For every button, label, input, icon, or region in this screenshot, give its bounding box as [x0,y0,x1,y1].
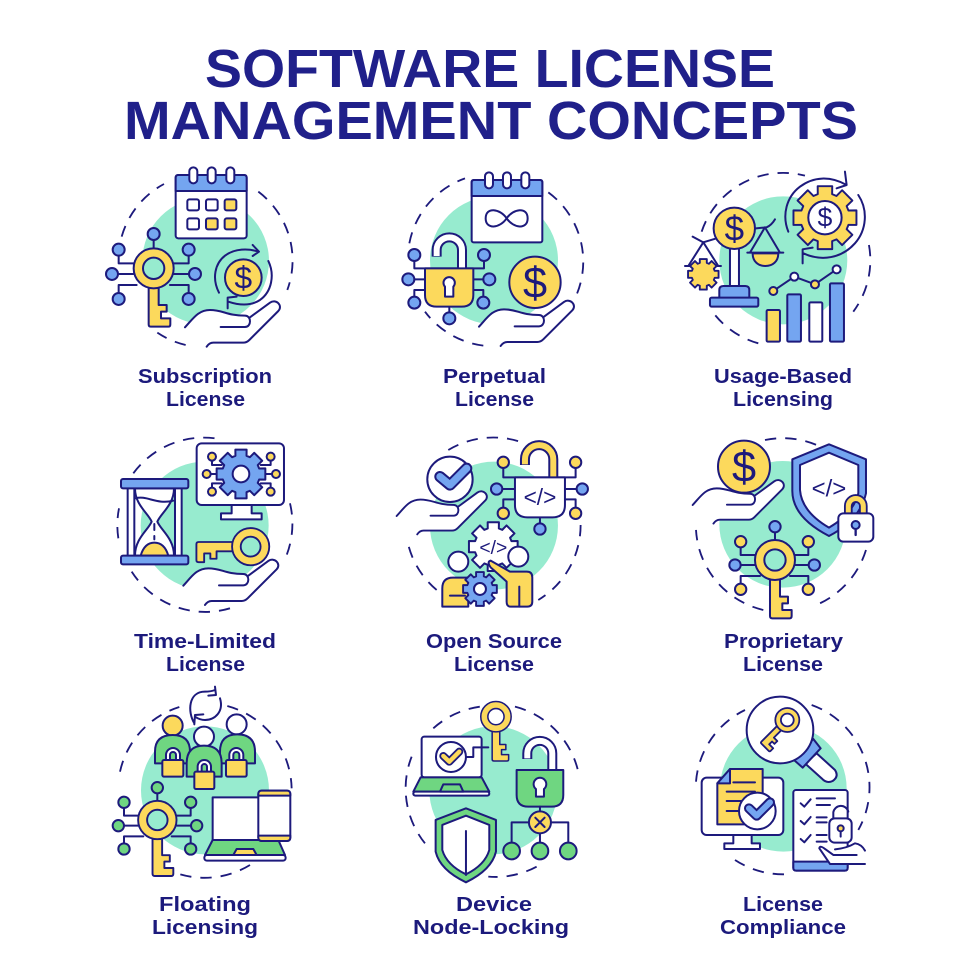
label [152,893,258,939]
icon: balance scale: $ [725,209,744,248]
icon: monitor with gear [197,443,284,519]
panel: proprietary license [693,438,873,676]
title [124,39,858,151]
label: Subscription [138,365,272,388]
icon: balance scale [685,208,783,307]
label: Time-Limited [134,630,276,653]
icon: floating licensing [113,687,292,878]
label: License [166,388,245,411]
label: Node-Locking [413,916,569,939]
label [413,893,569,939]
label [138,365,272,411]
icon: hand with coin [693,441,784,528]
label: Usage-Based [714,365,852,388]
icon: key [196,528,269,565]
label: Licensing [733,388,833,411]
label [443,365,546,411]
icon: hourglass [121,479,188,564]
label: Perpetual [443,365,546,388]
panel: floating licensing [113,687,292,939]
label [724,630,844,676]
icon: padlock with network nodes [402,237,495,324]
icon: shield [436,808,496,882]
icon: time-limited license [117,438,292,612]
icon: rotation arrows [190,687,221,724]
icon: users with padlocks [155,714,255,789]
icon: key with network nodes [106,228,201,327]
title: MANAGEMENT CONCEPTS [124,91,858,151]
label: Device [456,893,532,916]
icon: subscription license [106,167,293,352]
icon: calendar [176,167,247,238]
icon: hand with coin: $ [732,444,756,492]
icon: code shield with padlock: </> [812,476,846,503]
panel: open source license [397,438,588,676]
icon: dollar coin [509,257,561,308]
icon: hand with check mark [397,457,487,539]
title: SOFTWARE LICENSE [205,39,775,99]
panel: perpetual license [402,172,583,411]
panel: license compliance [696,697,870,939]
icon: device node-locking [406,701,579,882]
label: Open Source [426,630,562,653]
icon: code padlock with nodes [491,445,588,535]
label: License [743,653,823,676]
icon: dollar coin: $ [523,259,547,307]
bar chart [767,265,844,342]
icon: open hand [185,301,280,352]
icon: padlock with decision tree [503,741,577,859]
icon: code padlock with nodes: </> [524,484,556,510]
label [720,893,846,939]
label: License [455,388,534,411]
icon: laptop with check mark [413,737,489,796]
icon: magnifier with key [747,697,837,782]
icon: perpetual license [402,172,583,351]
icon: proprietary license [693,438,873,618]
icon: laptop and phone [204,791,290,861]
icon: dollar renewal: $ [235,259,253,295]
label: License [166,653,245,676]
label: Compliance [720,916,846,939]
label: Licensing [152,916,258,939]
label [714,365,852,411]
icon: key with network nodes [113,782,202,876]
label: Proprietary [724,630,844,653]
icon: monitor with document [702,769,783,849]
icon: infinity calendar [472,172,542,242]
icon: developers with gears: </> [479,538,507,559]
panel: subscription license [106,167,293,411]
icon: key with network nodes [729,521,820,618]
icon: usage-based licensing [685,172,870,343]
icon: checklist with padlock in hand [793,790,865,871]
icon: license compliance [696,697,870,874]
label: License [454,653,534,676]
panel: usage-based licensing [685,172,870,411]
icon: developers with gears [442,522,532,607]
icon: open hand [183,560,278,610]
icon: gear with dollar and cycle arrows [785,172,865,263]
icon: key [481,701,511,761]
label [134,630,276,676]
label: License [743,893,823,916]
label [426,630,562,676]
icon: dollar renewal [215,245,272,308]
icon: open source license [397,438,588,607]
icon: open hand [479,301,574,351]
panel: device node-locking [406,701,579,939]
icon: gear with dollar and cycle arrows: $ [818,203,833,233]
icon: code shield with padlock [792,444,873,542]
panel: time-limited license [117,438,292,676]
label: Floating [159,893,251,916]
